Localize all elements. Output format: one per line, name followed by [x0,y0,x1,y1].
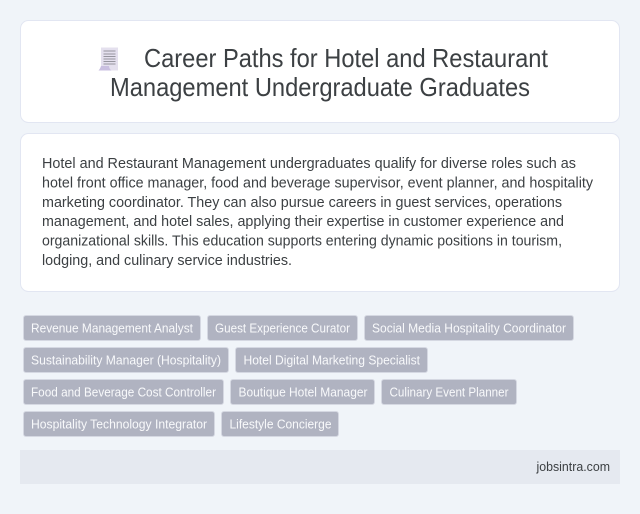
tag: Hotel Digital Marketing Specialist [236,348,428,372]
tag: Sustainability Manager (Hospitality): Sustainability Manager (Hospitality) [31,354,221,368]
title [110,43,549,102]
title: Management Undergraduate Graduates [110,72,530,102]
tag: Lifestyle Concierge [222,412,338,436]
tag: Social Media Hospitality Coordinator: Social Media Hospitality Coordinator [372,322,566,336]
footer text: source site: jobsintra.com [536,459,610,474]
tag: Food and Beverage Cost Controller [24,380,224,404]
tag: Revenue Management Analyst: Revenue Management Analyst [31,322,193,336]
text block: description paragraph: marketing coordinator. They can also pursue careers in guest services, operations [42,195,562,211]
footer bar [20,450,620,484]
panel: career tags [24,316,574,436]
text block: description paragraph: organizational skills. This education supports entering dynamic positions in tourism, [42,234,562,250]
text block: description paragraph: management, and hotel sales, applying their expertise in customer experience and [42,214,564,230]
tag: Boutique Hotel Manager [230,380,374,404]
tag: Culinary Event Planner: Culinary Event Planner [390,386,508,400]
tag: Guest Experience Curator [208,316,358,340]
tag: Sustainability Manager (Hospitality) [24,348,228,372]
text block: description paragraph: hotel front office manager, food and beverage supervisor, event planner, and hospitality [42,176,594,192]
tag: Boutique Hotel Manager: Boutique Hotel Manager [238,386,368,400]
tag: Hospitality Technology Integrator [24,412,214,436]
panel: description [20,134,620,292]
tag: Revenue Management Analyst [24,316,200,340]
title: Career Paths for Hotel and Restaurant [144,43,549,73]
tag: Hospitality Technology Integrator: Hospitality Technology Integrator [31,418,207,432]
text block: description paragraph: Hotel and Restaurant Management undergraduates qualify for diverse roles such as [42,156,576,172]
panel: title card [20,20,620,122]
tag: Food and Beverage Cost Controller: Food and Beverage Cost Controller [31,386,216,400]
text block: description paragraph: lodging, and culinary service industries. [42,253,292,269]
text block: description paragraph [42,156,594,269]
tag: Social Media Hospitality Coordinator [364,316,574,340]
tag: Culinary Event Planner [382,380,516,404]
tag: Guest Experience Curator: Guest Experience Curator [215,322,350,336]
icon: document scroll [98,48,118,70]
tag: Lifestyle Concierge: Lifestyle Concierge [230,418,332,432]
tag: Hotel Digital Marketing Specialist: Hotel Digital Marketing Specialist [244,354,420,368]
